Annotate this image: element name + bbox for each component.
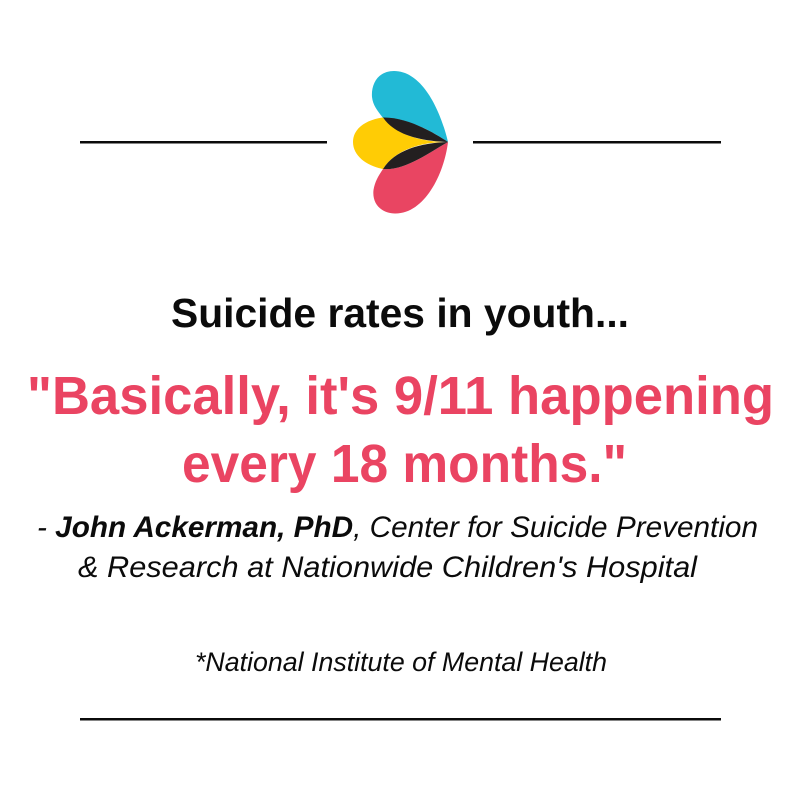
icon: three-petal logo [353,71,448,214]
attribution: - John Ackerman, PhD, Center for Suicide Prevention [37,511,758,544]
attribution: & Research at Nationwide Children's Hospital [78,551,698,584]
quote: every 18 months." [182,434,627,494]
heading: Suicide rates in youth... [171,290,629,336]
attribution [37,511,758,584]
quote: "Basically, it's 9/11 happening [27,366,774,426]
quote [27,366,774,494]
source note: *National Institute of Mental Health [195,647,607,677]
